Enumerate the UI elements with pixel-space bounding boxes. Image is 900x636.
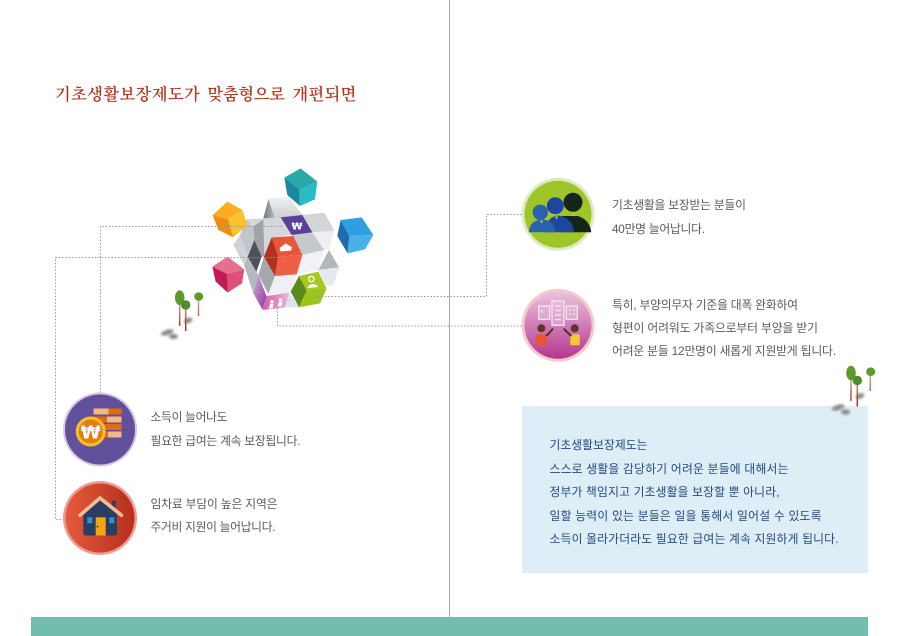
cube core [233, 197, 339, 309]
housing text: 임차료 부담이 높은 지역은 [150, 497, 278, 511]
bottom teal band [31, 617, 868, 636]
income text: 필요한 급여는 계속 보장됩니다. [150, 434, 300, 448]
people text: 40만명 늘어납니다. [612, 222, 705, 236]
orange cube [213, 202, 247, 237]
connector: pink tile to family circle [278, 308, 522, 326]
housing text [150, 497, 278, 534]
coin stack [94, 408, 122, 438]
title: 맞춤형으로 [208, 85, 285, 104]
family text: 형편이 어려워도 가족으로부터 부양을 받기 [612, 321, 818, 335]
summary panel: 정부가 책임지고 기초생활을 보장할 뿐 아니라, [550, 485, 780, 499]
family text: 특히, 부양의무자 기준을 대폭 완화하여 [612, 298, 798, 312]
income text: 소득이 늘어나도 [150, 410, 228, 424]
connector: green cube to people circle [315, 214, 522, 296]
people text: 기초생활을 보장받는 분들이 [612, 198, 746, 212]
family text: 어려운 분들 12만명이 새롭게 지원받게 됩니다. [612, 344, 836, 358]
summary panel: 스스로 생활을 감당하기 어려운 분들에 대해서는 [550, 462, 789, 476]
teal cube [284, 168, 317, 206]
purple won tile: ₩ [291, 221, 303, 232]
connector: housing cube to housing circle [56, 258, 278, 520]
blue cube [337, 217, 373, 253]
income circle icon: ₩ [81, 422, 101, 444]
summary panel: 기초생활보장제도는 [550, 438, 648, 452]
family text [612, 298, 836, 358]
income text [150, 410, 300, 448]
centre fold line [448, 0, 450, 636]
income circle icon [63, 392, 137, 466]
title: 기초생활보장제도가 [55, 85, 200, 104]
connector: income cube to income circle [100, 226, 284, 393]
people circle icon [522, 178, 594, 251]
pink cube [212, 257, 244, 293]
people text [612, 198, 746, 236]
title: 개편되면 [292, 85, 357, 104]
cube graphic [233, 197, 339, 310]
trees left [160, 290, 203, 339]
housing circle icon [63, 481, 137, 555]
summary panel: 소득이 올라가더라도 필요한 급여는 계속 지원하게 됩니다. [550, 532, 838, 546]
red house cube [264, 236, 302, 276]
housing text: 주거비 지원이 늘어납니다. [150, 520, 276, 534]
summary panel [522, 406, 868, 573]
green person cube [291, 272, 327, 307]
pink figures tile [262, 293, 289, 310]
summary panel: 일할 능력이 있는 분들은 일을 통해서 일어설 수 있도록 [550, 509, 822, 523]
family circle icon [522, 289, 594, 362]
colour cubes around the core [212, 168, 373, 293]
trees right [831, 366, 875, 415]
